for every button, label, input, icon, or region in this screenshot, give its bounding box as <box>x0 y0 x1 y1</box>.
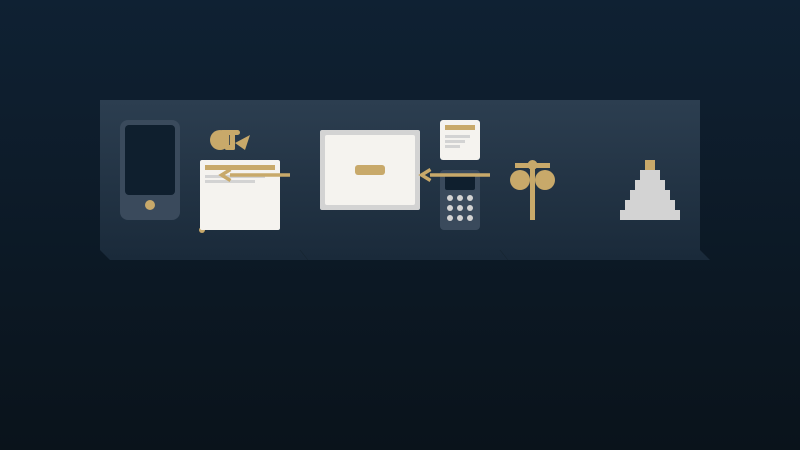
arrow: to tablet <box>422 170 490 180</box>
panel: counter <box>100 100 710 260</box>
receipt <box>440 120 480 160</box>
icon: stepped tower <box>620 160 680 220</box>
document card <box>199 160 280 233</box>
payment terminal <box>440 170 480 230</box>
icon: smartphone <box>120 120 180 220</box>
tablet <box>320 130 420 210</box>
arrow: to document <box>222 170 290 180</box>
icon: balance scale <box>510 160 555 220</box>
icon: key and tag <box>210 130 250 150</box>
